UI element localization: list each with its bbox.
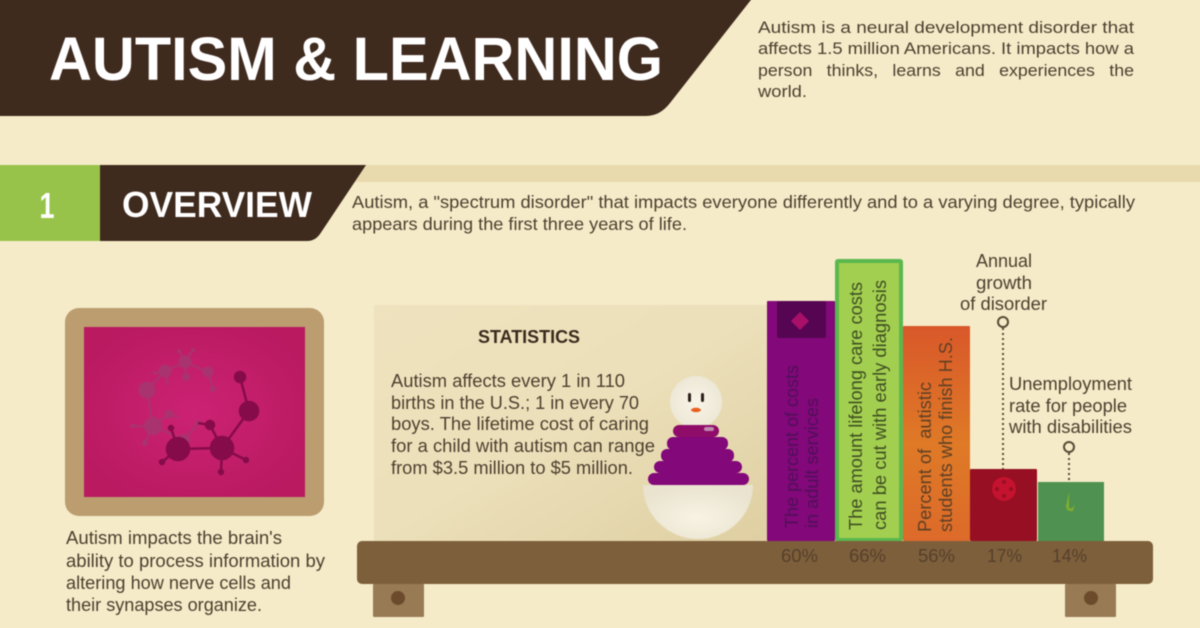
book: purple	[767, 301, 835, 541]
section 1 header: OVERVIEW	[122, 184, 312, 225]
section strip	[340, 165, 1200, 182]
statistics text: for a child with autism can range	[391, 436, 655, 456]
statistics text	[391, 371, 655, 478]
board caption: ability to process information by	[66, 551, 325, 571]
icon: stacking toy figure	[643, 376, 753, 539]
overview text	[352, 192, 1135, 234]
shelf percentages: 17%	[987, 546, 1022, 566]
callout: annual growth: Annual	[976, 251, 1032, 271]
statistics text: births in the U.S.; 1 in every 70	[391, 393, 639, 413]
shelf percentages: 60%	[781, 546, 818, 566]
book: red	[970, 469, 1037, 541]
callout: unemployment: with disabilities	[1008, 417, 1132, 437]
intro text: Autism is a neural development disorder that	[758, 18, 1134, 37]
book: dark green	[1038, 482, 1104, 541]
overview text: appears during the first three years of life.	[352, 214, 687, 234]
intro text	[757, 18, 1135, 101]
statistics heading: STATISTICS	[478, 327, 580, 347]
callout: unemployment	[1008, 374, 1132, 482]
book: green	[837, 261, 901, 540]
title banner	[0, 0, 754, 116]
board caption: Autism impacts the brain's	[66, 528, 282, 548]
callout: unemployment: Unemployment	[1009, 374, 1132, 394]
callout: annual growth: growth	[976, 273, 1032, 293]
book: purple: in adult services	[802, 398, 822, 528]
overview text: Autism, a "spectrum disorder" that impacts everyone differently and to a varying degree, typically	[352, 192, 1135, 212]
intro text: person thinks, learns and experiences the	[758, 61, 1134, 80]
book: orange: Percent of autistic	[915, 382, 935, 532]
book: green: The amount lifelong care costs	[846, 282, 866, 530]
statistics panel	[374, 305, 767, 541]
board caption	[66, 528, 325, 615]
molecule: dark	[160, 372, 258, 474]
book: green: can be cut with early diagnosis	[870, 280, 890, 530]
brain board illustration	[65, 308, 324, 516]
title: AUTISM & LEARNING	[49, 25, 663, 93]
shelf percentages: 66%	[849, 546, 886, 566]
callout: unemployment: rate for people	[1009, 396, 1127, 416]
board caption: their synapses organize.	[66, 595, 262, 615]
shelf percentages	[781, 546, 1087, 566]
molecule: faded	[132, 349, 215, 445]
callout: annual growth	[960, 251, 1047, 469]
statistics text: from $3.5 million to $5 million.	[391, 458, 633, 478]
section 1 header: 1	[40, 185, 54, 226]
statistics text: boys. The lifetime cost of caring	[391, 414, 649, 434]
intro text: affects 1.5 million Americans. It impacts how a	[758, 39, 1135, 58]
section 1 header	[0, 165, 366, 241]
shelf percentages: 56%	[918, 546, 955, 566]
callout: annual growth: of disorder	[960, 294, 1047, 314]
book: orange	[903, 326, 970, 541]
book: purple: The percent of costs	[782, 365, 802, 528]
shelf percentages: 14%	[1052, 546, 1087, 566]
book: orange: students who finish H.S.	[936, 337, 956, 532]
intro text: world.	[757, 82, 807, 101]
board caption: altering how nerve cells and	[66, 573, 291, 593]
statistics text: Autism affects every 1 in 110	[391, 371, 625, 391]
shelf	[357, 541, 1153, 617]
